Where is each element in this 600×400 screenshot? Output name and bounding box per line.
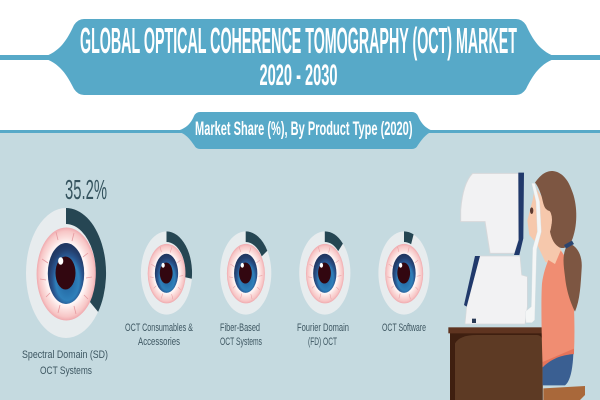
eye chart: fiber-based [220,231,271,315]
neck and face [527,187,563,264]
label: fourier domain: Fourier Domain [297,322,349,334]
value label: 35.2% [65,174,107,205]
label: fiber-based [220,322,262,348]
label: software: OCT Software [382,322,426,334]
shirt [541,251,574,367]
label: consumables: OCT Consumables & [125,322,193,334]
machine button [472,319,476,323]
machine lower navy strip [464,256,480,307]
eye chart: fourier domain [299,231,350,315]
shirt hem [543,349,574,368]
eye chart: spectral domain [26,208,106,338]
subtitle text: Market Share (%), By Product Type (2020) [195,119,412,140]
label: consumables: Accessories [138,336,180,348]
background panel [0,132,600,400]
label: fourier domain: (FD) OCT [308,336,337,348]
title banner: 2020 - 2030 [260,59,338,92]
head strap [525,183,541,323]
hair [535,171,576,248]
stool [543,386,585,400]
label: spectral domain [22,349,108,377]
eye chart: software [378,231,430,315]
label: fiber-based: Fiber-Based [220,322,260,334]
eye of patient [530,207,533,214]
machine upper body [461,173,519,253]
table [448,327,545,400]
label: consumables [125,322,193,348]
subtitle banner [0,112,600,149]
ear [545,211,552,229]
illustration: patient at OCT machine [448,171,585,400]
ponytail [564,243,582,312]
eye chart: consumables [141,231,192,315]
label: fiber-based: OCT Systems [220,336,262,348]
label: fourier domain [297,322,349,348]
machine upper navy strip [514,173,524,255]
machine lower body [465,256,527,324]
label: spectral domain: OCT Systems [40,365,92,377]
jeans [543,354,573,385]
label: spectral domain: Spectral Domain (SD) [22,349,108,361]
title banner [0,19,600,95]
hair tie [564,241,574,249]
